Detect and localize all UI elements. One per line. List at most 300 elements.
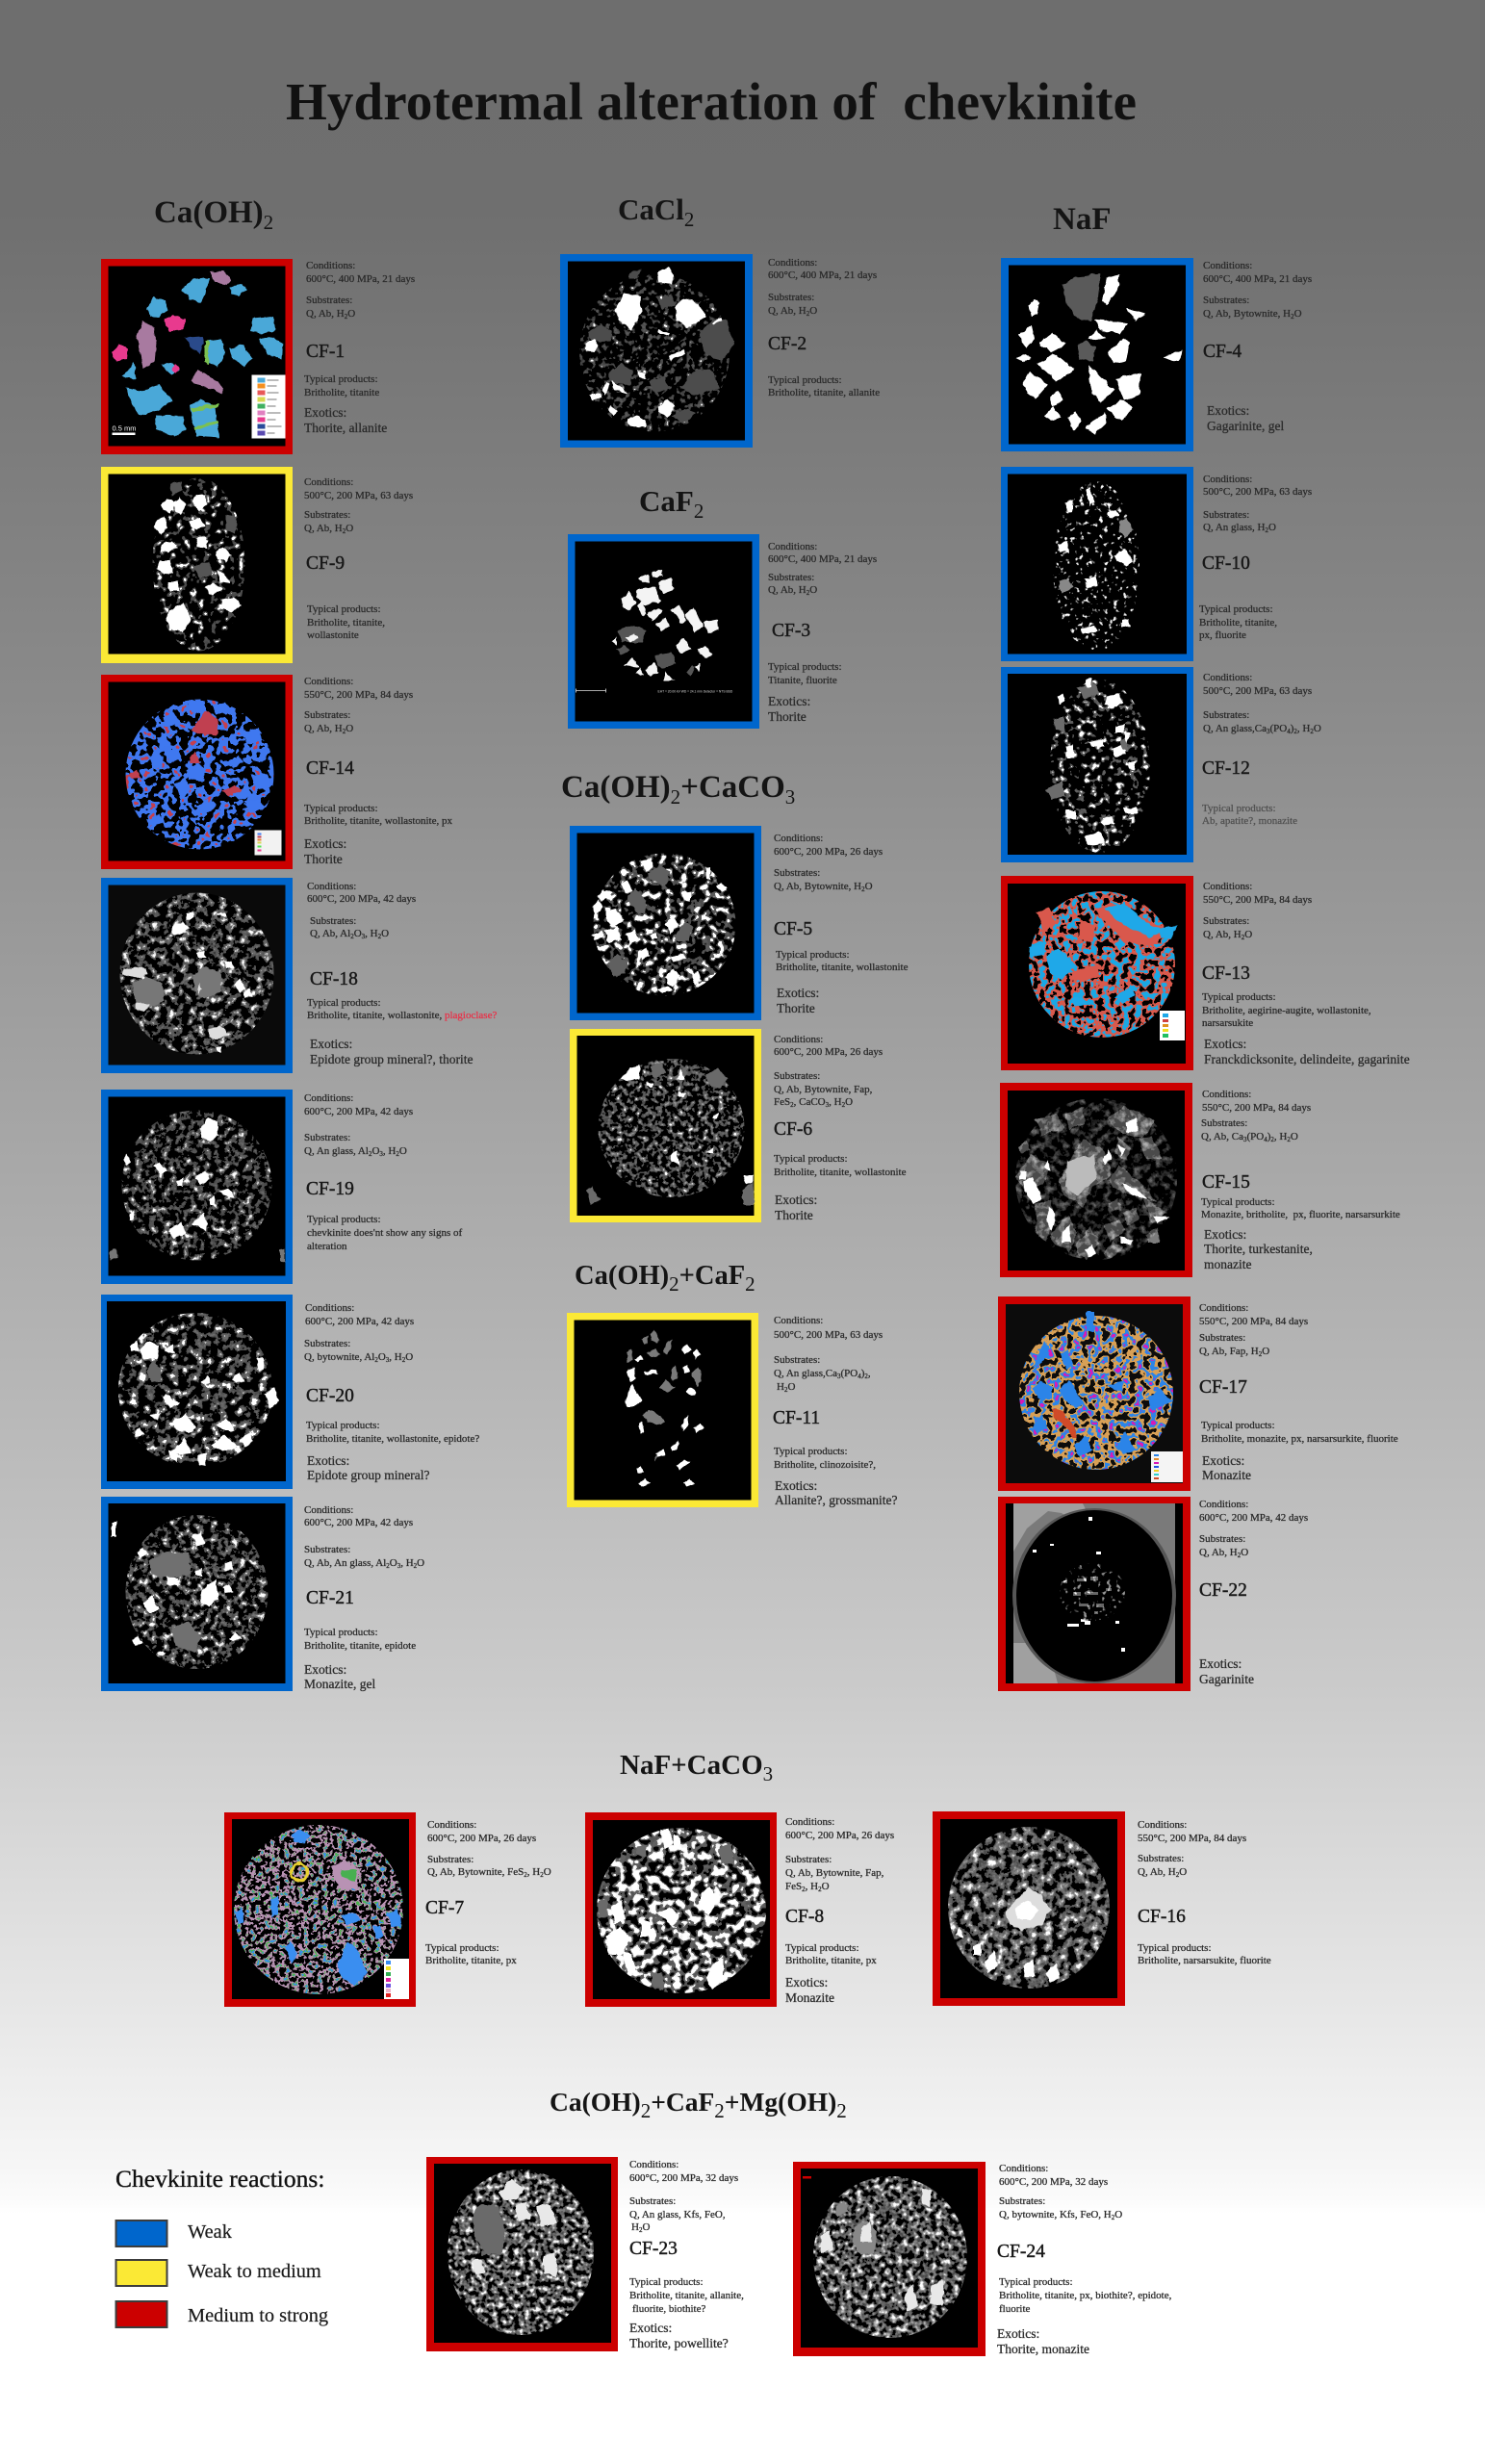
heading: CaCl2: 2 — [684, 208, 694, 231]
panel: CF-17 — [998, 1296, 1398, 1491]
text: CF-9: 500°C, 200 MPa, 63 days — [304, 490, 413, 501]
text: CF-21: Exotics: — [304, 1662, 346, 1677]
text: CF-7: O — [544, 1866, 551, 1878]
text: CF-6: Typical products: — [774, 1153, 848, 1165]
image: CF-23 — [426, 2157, 618, 2351]
text: CF-21: , H — [400, 1557, 414, 1569]
image: CF-18 — [101, 878, 293, 1073]
text: CF-24: Q, bytownite, Kfs, FeO, H — [999, 2209, 1112, 2220]
text: CF-19: 3 — [379, 1150, 383, 1158]
text: CF-23: O — [642, 2221, 650, 2233]
text: CF-19: O — [371, 1145, 379, 1157]
text: CF-17: Substrates: — [1199, 1332, 1245, 1344]
text: CF-2: Britholite, titanite, allanite — [768, 387, 880, 398]
panel: CF-8 — [585, 1812, 894, 2007]
text: CF-2: Substrates: — [768, 292, 814, 303]
panel: CF-13 — [1001, 876, 1410, 1070]
text: CF-5: Q, Ab, Bytownite, H — [774, 881, 861, 892]
image: CF-13 — [1001, 876, 1193, 1070]
text: CF-1: Substrates: — [306, 295, 352, 306]
text: CF-4: Exotics: — [1207, 403, 1249, 418]
text: CF-20: 2 — [374, 1356, 378, 1364]
text: CF-6: Q, Ab, Bytownite, Fap, — [774, 1084, 873, 1095]
text: CF-22: CF-22 — [1199, 1580, 1247, 1601]
text: CF-12 — [1202, 672, 1321, 827]
image: CF-15 — [1000, 1083, 1192, 1277]
text: CF-3: 2 — [807, 589, 810, 597]
text: CF-19: 2 — [396, 1150, 399, 1158]
legend item: Weak — [115, 2220, 233, 2246]
scale bar and SEM data text: EHT = 20.00 kV WD = 24.1 mm Detector = NTS BSD — [658, 689, 733, 693]
text: CF-2 — [768, 257, 880, 398]
text: CF-13: Typical products: — [1202, 991, 1276, 1003]
text: CF-12: 4 — [1287, 728, 1291, 735]
text: CF-14: O — [346, 723, 353, 734]
text: CF-19: alteration — [307, 1241, 347, 1252]
text: CF-1: Conditions: — [306, 260, 355, 271]
text: CF-6: 600°C, 200 MPa, 26 days — [774, 1046, 883, 1058]
image: CF-12 — [1001, 667, 1193, 862]
text: CF-14: Britholite, titanite, wollastonite, px — [304, 815, 452, 827]
text: CF-23: Conditions: — [629, 2159, 678, 2170]
text: CF-12: O — [1314, 723, 1321, 734]
image: CF-16 — [933, 1811, 1125, 2006]
text: CF-17: Exotics: — [1202, 1453, 1244, 1468]
text: CF-9: Substrates: — [304, 509, 350, 521]
text: CF-3: Typical products: — [768, 661, 842, 673]
image: CF-10 — [1001, 467, 1193, 661]
inset legend — [252, 375, 285, 439]
text: CF-15: Typical products: — [1201, 1196, 1275, 1208]
text: CF-2: O — [809, 305, 817, 317]
text: CF-18: CF-18 — [310, 969, 358, 989]
text: CF-8 — [785, 1816, 894, 2005]
panel: CF-1 — [101, 259, 415, 454]
text: CF-8: FeS — [785, 1881, 802, 1892]
text: CF-10: 500°C, 200 MPa, 63 days — [1203, 486, 1312, 498]
text: CF-17: Typical products: — [1201, 1420, 1275, 1431]
text: CF-20: Exotics: — [307, 1453, 349, 1468]
image: CF-20 — [101, 1295, 293, 1489]
text: CF-15: ) — [1267, 1131, 1271, 1142]
text: CF-6: CF-6 — [774, 1119, 812, 1140]
text: CF-16: O — [1179, 1866, 1187, 1878]
text: CF-13: Franckdicksonite, delindeite, gagarinite — [1204, 1052, 1410, 1066]
text: CF-7: , H — [527, 1866, 540, 1878]
text: CF-18: Britholite, titanite, wollastonite, plagioclase? — [307, 1010, 497, 1021]
text: CF-18: 2 — [350, 933, 354, 940]
text: CF-21: Typical products: — [304, 1627, 378, 1638]
panel: CF-12 — [1001, 667, 1321, 862]
text: CF-15: Q, Ab, Ca — [1201, 1131, 1243, 1142]
text: CF-5: 2 — [861, 886, 865, 893]
panel: CF-20 — [101, 1295, 479, 1489]
panel: CF-16 — [933, 1811, 1271, 2006]
text: CF-22: O — [1241, 1547, 1248, 1558]
text: CF-10: px, fluorite — [1199, 629, 1246, 641]
text: CF-10: Britholite, titanite, — [1199, 617, 1277, 629]
text: CF-15 — [1201, 1089, 1400, 1271]
heading: Ca(OH)2+CaCO3: +CaCO — [680, 770, 785, 805]
text: CF-12: Typical products: — [1202, 803, 1276, 814]
text: CF-24: Britholite, titanite, px, biothite?, epidote, — [999, 2290, 1172, 2301]
text: CF-23 — [629, 2159, 744, 2350]
text: CF-24: 2 — [1112, 2214, 1115, 2221]
text: CF-17: 550°C, 200 MPa, 84 days — [1199, 1316, 1308, 1327]
text: CF-20: , H — [389, 1351, 402, 1363]
text: CF-1: Q, Ab, H — [306, 308, 345, 320]
text: CF-14: Thorite — [304, 852, 343, 866]
panel: CF-3 — [568, 534, 877, 729]
text: CF-11: 500°C, 200 MPa, 63 days — [774, 1329, 883, 1341]
text: CF-10: Typical products: — [1199, 603, 1273, 615]
heading: Ca(OH)2: Ca(OH) — [154, 195, 264, 230]
text: CF-2: Q, Ab, H — [768, 305, 807, 317]
text: CF-18: Substrates: — [310, 915, 356, 927]
text: CF-6: FeS — [774, 1096, 790, 1108]
text: CF-22: Gagarinite — [1199, 1672, 1254, 1686]
panel: CF-10 — [1001, 467, 1312, 661]
text: CF-12: (PO — [1270, 723, 1287, 734]
text: CF-14: Exotics: — [304, 836, 346, 851]
text: CF-5: Substrates: — [774, 867, 820, 879]
text: CF-10: 2 — [1265, 526, 1268, 534]
text: CF-3: O — [809, 584, 817, 596]
text: CF-20 — [304, 1302, 479, 1482]
legend item: Weak to medium: Weak to medium — [188, 2261, 321, 2282]
text: CF-4: O — [1294, 308, 1302, 320]
text: CF-24: Substrates: — [999, 2195, 1045, 2207]
image: CF-24 — [793, 2162, 986, 2356]
legend title: Chevkinite reactions: — [115, 2165, 324, 2193]
text: CF-11: (PO — [841, 1368, 858, 1379]
heading: Ca(OH)2: 2 — [264, 211, 273, 234]
text: CF-5 — [774, 833, 909, 1015]
text: CF-1: 2 — [345, 313, 348, 321]
image: CF-2 — [560, 254, 753, 448]
text: CF-15: 2 — [1287, 1136, 1291, 1143]
panel: CF-6 — [570, 1029, 907, 1222]
text: CF-12: 2 — [1310, 728, 1314, 735]
text: CF-7: Conditions: — [427, 1819, 476, 1831]
text: CF-13: Exotics: — [1204, 1037, 1246, 1051]
text: CF-23: Britholite, titanite, allanite, — [629, 2290, 744, 2301]
text: CF-15: (PO — [1247, 1131, 1264, 1142]
text: CF-14 — [304, 676, 452, 866]
text: CF-16: 2 — [1176, 1871, 1180, 1879]
text: CF-9: CF-9 — [306, 553, 345, 574]
text: CF-7 — [425, 1819, 551, 1966]
text: CF-5: O — [865, 881, 873, 892]
text: CF-22: Exotics: — [1199, 1656, 1242, 1671]
text: CF-15: Exotics: — [1204, 1227, 1246, 1242]
text: CF-5: 600°C, 200 MPa, 26 days — [774, 846, 883, 858]
heading: Ca(OH)2+CaF2+Mg(OH)2: +Mg(OH) — [725, 2087, 836, 2117]
panel: CF-24 — [793, 2162, 1172, 2356]
text: CF-2: Typical products: — [768, 374, 842, 386]
text: CF-17: CF-17 — [1199, 1377, 1247, 1398]
image: CF-4 — [1001, 258, 1193, 451]
image: CF-6 — [570, 1029, 761, 1222]
panel: CF-14 — [101, 675, 452, 869]
text: CF-17: 2 — [1259, 1350, 1263, 1358]
text: CF-6: Conditions: — [774, 1034, 823, 1045]
inset legend — [384, 1959, 409, 1999]
legend item: Medium to strong — [115, 2301, 328, 2327]
heading: Ca(OH)2+CaF2+Mg(OH)2: Ca(OH) — [550, 2087, 641, 2117]
text: CF-3: Titanite, fluorite — [768, 675, 837, 686]
text: CF-23: CF-23 — [629, 2239, 678, 2259]
heading: Ca(OH)2+CaCO3: Ca(OH) — [561, 770, 671, 805]
text: CF-3 — [768, 541, 877, 724]
text: CF-21 — [304, 1504, 424, 1691]
text: CF-11: H — [777, 1381, 784, 1393]
text: CF-7: 2 — [540, 1871, 544, 1879]
text: CF-24: CF-24 — [997, 2242, 1045, 2262]
text: CF-8: 2 — [802, 1886, 806, 1893]
text: CF-11: Britholite, clinozoisite?, — [774, 1459, 876, 1471]
text: CF-6 — [774, 1034, 907, 1222]
text: CF-12: Q, An glass,Ca — [1203, 723, 1267, 734]
text: CF-23: 2 — [639, 2226, 643, 2234]
text: CF-21: Substrates: — [304, 1544, 350, 1555]
text: CF-16 — [1138, 1819, 1271, 1966]
text: CF-8: Q, Ab, Bytownite, Fap, — [785, 1867, 884, 1879]
text: CF-18: Conditions: — [307, 881, 356, 892]
panel: CF-22 — [998, 1497, 1308, 1691]
text: CF-16: Substrates: — [1138, 1853, 1184, 1864]
text: CF-24: fluorite — [999, 2303, 1030, 2315]
text: CF-18: Typical products: — [307, 997, 381, 1009]
image: CF-7 — [224, 1812, 416, 2007]
text: CF-4: Q, Ab, Bytownite, H — [1203, 308, 1291, 320]
text: CF-5: Britholite, titanite, wollastonite — [776, 962, 909, 973]
heading: Ca(OH)2+CaF2+Mg(OH)2: 2 — [836, 2099, 847, 2122]
text: CF-13: Conditions: — [1203, 881, 1252, 892]
text: CF-6: Substrates: — [774, 1070, 820, 1082]
text: CF-1: Exotics: — [304, 405, 346, 420]
text: CF-6: 2 — [790, 1101, 794, 1109]
text: CF-7: Britholite, titanite, px — [425, 1955, 517, 1966]
text: CF-23: Substrates: — [629, 2195, 676, 2207]
text: CF-18: Exotics: — [310, 1037, 352, 1051]
text: CF-20: Epidote group mineral? — [307, 1468, 429, 1482]
text: CF-19: 600°C, 200 MPa, 42 days — [304, 1106, 413, 1117]
text: CF-6: 2 — [842, 1101, 846, 1109]
text: CF-17: Monazite — [1202, 1468, 1251, 1482]
text: CF-11: 4 — [858, 1373, 861, 1380]
text: CF-8: , H — [806, 1881, 818, 1892]
text: CF-20: 600°C, 200 MPa, 42 days — [305, 1316, 414, 1327]
text: CF-18: Epidote group mineral?, thorite — [310, 1052, 473, 1066]
text: CF-6: Thorite — [775, 1208, 813, 1222]
text: CF-6: Britholite, titanite, wollastonite — [774, 1167, 907, 1178]
image: CF-11 — [567, 1313, 758, 1507]
text: CF-23: fluorite, biothite? — [632, 2303, 705, 2315]
text: CF-11: Typical products: — [774, 1446, 848, 1457]
heading: Ca(OH)2+CaF2: 2 — [669, 1272, 679, 1296]
inset legend — [1151, 1451, 1183, 1482]
text: CF-8: Britholite, titanite, px — [785, 1955, 877, 1966]
heading: NaF+CaCO3: 3 — [763, 1762, 773, 1785]
text: CF-4: 600°C, 400 MPa, 21 days — [1203, 273, 1312, 285]
text: CF-18: 600°C, 200 MPa, 42 days — [307, 893, 416, 905]
text: CF-22: 600°C, 200 MPa, 42 days — [1199, 1512, 1308, 1524]
heading: CaCl2: CaCl — [618, 192, 684, 226]
text: CF-1: Typical products: — [304, 373, 378, 385]
text: CF-20: Q, bytownite, Al — [304, 1351, 374, 1363]
text: CF-19: O — [399, 1145, 407, 1157]
text: CF-16: CF-16 — [1138, 1907, 1186, 1927]
text: CF-7: 600°C, 200 MPa, 26 days — [427, 1833, 536, 1844]
text: CF-11 — [773, 1315, 897, 1507]
text: CF-7: 2 — [524, 1871, 527, 1879]
text: CF-16: Q, Ab, H — [1138, 1866, 1176, 1878]
text: CF-21: Britholite, titanite, epidote — [304, 1640, 416, 1652]
text: CF-21: 600°C, 200 MPa, 42 days — [304, 1517, 413, 1528]
text: CF-11: O — [787, 1381, 795, 1393]
text: CF-22: 2 — [1238, 1552, 1242, 1559]
text: CF-14: 550°C, 200 MPa, 84 days — [304, 689, 413, 701]
text: CF-8: 2 — [818, 1886, 822, 1893]
text: CF-21: 3 — [397, 1562, 401, 1570]
small red mark — [803, 2176, 811, 2179]
image: CF-9 — [101, 467, 293, 663]
scale bar: 0.5 mm — [112, 424, 137, 433]
text: CF-23: Thorite, powellite? — [629, 2336, 729, 2350]
heading: Ca(OH)2+CaF2+Mg(OH)2: 2 — [641, 2099, 651, 2122]
text: CF-18: 3 — [362, 933, 366, 940]
text: CF-18: Q, Ab, Al — [310, 928, 350, 939]
text: CF-14: Substrates: — [304, 709, 350, 721]
text: CF-2: 600°C, 400 MPa, 21 days — [768, 270, 877, 281]
text: CF-7: CF-7 — [425, 1898, 464, 1918]
text: CF-24: Exotics: — [997, 2326, 1039, 2341]
text: CF-3: Q, Ab, H — [768, 584, 807, 596]
text: CF-18: 2 — [378, 933, 382, 940]
text: CF-11: Exotics: — [775, 1478, 817, 1493]
image: CF-19 — [101, 1090, 293, 1284]
text: CF-8: 600°C, 200 MPa, 26 days — [785, 1830, 894, 1841]
heading: CaF2: CaF — [639, 484, 694, 518]
text: CF-22: Conditions: — [1199, 1499, 1248, 1510]
text: CF-13: CF-13 — [1202, 963, 1250, 984]
text: CF-15: Conditions: — [1202, 1089, 1251, 1100]
text: CF-24: Typical products: — [999, 2276, 1073, 2288]
text: CF-8: Monazite — [785, 1990, 834, 2005]
text: CF-12: 2 — [1293, 728, 1297, 735]
text: CF-11: 2 — [784, 1386, 788, 1394]
panel: CF-18 — [101, 878, 497, 1073]
text: CF-11: CF-11 — [773, 1408, 820, 1428]
heading: Ca(OH)2+CaCO3: 2 — [671, 785, 680, 808]
text: CF-21: Q, Ab, An glass, Al — [304, 1557, 386, 1569]
text: CF-14: 2 — [343, 728, 346, 735]
text: CF-9: O — [346, 523, 353, 534]
text: CF-19: Substrates: — [304, 1132, 350, 1143]
text: CF-13: O — [1244, 929, 1252, 940]
text: CF-20: O — [378, 1351, 386, 1363]
text: CF-17: O — [1262, 1346, 1269, 1357]
panel: CF-23 — [426, 2157, 744, 2351]
panel: CF-7 — [224, 1812, 551, 2007]
text: CF-12: 3 — [1267, 728, 1270, 735]
text: CF-21: 2 — [386, 1562, 390, 1570]
text: CF-3: 600°C, 400 MPa, 21 days — [768, 553, 877, 565]
text: CF-15: , H — [1274, 1131, 1287, 1142]
text: CF-19 — [304, 1092, 462, 1252]
text: CF-11: 3 — [837, 1373, 841, 1380]
text: CF-15: 550°C, 200 MPa, 84 days — [1202, 1102, 1311, 1114]
text: CF-8: Typical products: — [785, 1942, 859, 1954]
text: CF-18 — [307, 881, 497, 1066]
text: CF-15: Substrates: — [1201, 1117, 1247, 1129]
text: CF-3: Exotics: — [768, 694, 810, 708]
text: CF-13: 550°C, 200 MPa, 84 days — [1203, 894, 1312, 906]
text: CF-8: CF-8 — [785, 1907, 824, 1927]
text: CF-4: Substrates: — [1203, 295, 1249, 306]
text: CF-6: , CaCO — [794, 1096, 826, 1108]
text: CF-15: Monazite, britholite, px, fluorite, narsarsurkite — [1201, 1209, 1400, 1220]
text: CF-10: Substrates: — [1203, 509, 1249, 521]
text: CF-22: Q, Ab, H — [1199, 1547, 1238, 1558]
text: CF-2: Conditions: — [768, 257, 817, 269]
image: CF-14 — [101, 675, 293, 869]
image: CF-3 — [568, 534, 759, 729]
text: CF-4: Gagarinite, gel — [1207, 419, 1284, 433]
text: CF-18: O — [381, 928, 389, 939]
legend: Chevkinite reactions — [115, 2165, 328, 2327]
text: CF-24 — [997, 2163, 1172, 2356]
text: CF-20: Britholite, titanite, wollastonite, epidote? — [306, 1433, 479, 1445]
text: CF-9: Conditions: — [304, 476, 353, 488]
image: CF-22 — [998, 1497, 1191, 1691]
text: CF-24: Conditions: — [999, 2163, 1048, 2174]
text: CF-11: , — [868, 1368, 871, 1379]
text: CF-20: CF-20 — [306, 1386, 354, 1406]
panel: CF-2 — [560, 254, 880, 448]
text: CF-19: CF-19 — [306, 1179, 354, 1199]
image: CF-21 — [101, 1497, 293, 1691]
text: CF-20: 2 — [402, 1356, 406, 1364]
text: CF-13: Britholite, aegirine-augite, wollastonite, — [1202, 1005, 1371, 1016]
text: CF-3: Thorite — [768, 709, 807, 724]
text: CF-3: Conditions: — [768, 541, 817, 552]
text: CF-23: 600°C, 200 MPa, 32 days — [629, 2172, 738, 2184]
text: CF-8: Exotics: — [785, 1975, 828, 1989]
text: CF-23: Q, An glass, Kfs, FeO, — [629, 2209, 726, 2220]
text: CF-17: Q, Ab, Fap, H — [1199, 1346, 1259, 1357]
text: CF-20: Conditions: — [305, 1302, 354, 1314]
text: CF-7: Substrates: — [427, 1854, 474, 1865]
image: CF-5 — [570, 826, 761, 1020]
text: CF-17: Conditions: — [1199, 1302, 1248, 1314]
text: CF-19: chevkinite does'nt show any signs of — [307, 1227, 462, 1239]
text: CF-22 — [1199, 1499, 1308, 1686]
text: CF-19: , H — [383, 1145, 396, 1157]
text: CF-10: CF-10 — [1202, 553, 1250, 574]
text: CF-17: Britholite, monazite, px, narsarsurkite, fluorite — [1201, 1433, 1398, 1445]
scale bar and SEM data text — [576, 689, 733, 693]
text: CF-9 — [304, 476, 413, 641]
text: CF-14: Q, Ab, H — [304, 723, 343, 734]
heading: Ca(OH)2+CaF2: +CaF — [679, 1261, 745, 1291]
text: CF-15: 3 — [1243, 1136, 1247, 1143]
text: CF-8: Conditions: — [785, 1816, 834, 1828]
text: CF-18: , H — [365, 928, 378, 939]
legend item: Medium to strong: Medium to strong — [188, 2305, 328, 2326]
text: CF-16: Britholite, narsarsukite, fluorite — [1138, 1955, 1271, 1966]
